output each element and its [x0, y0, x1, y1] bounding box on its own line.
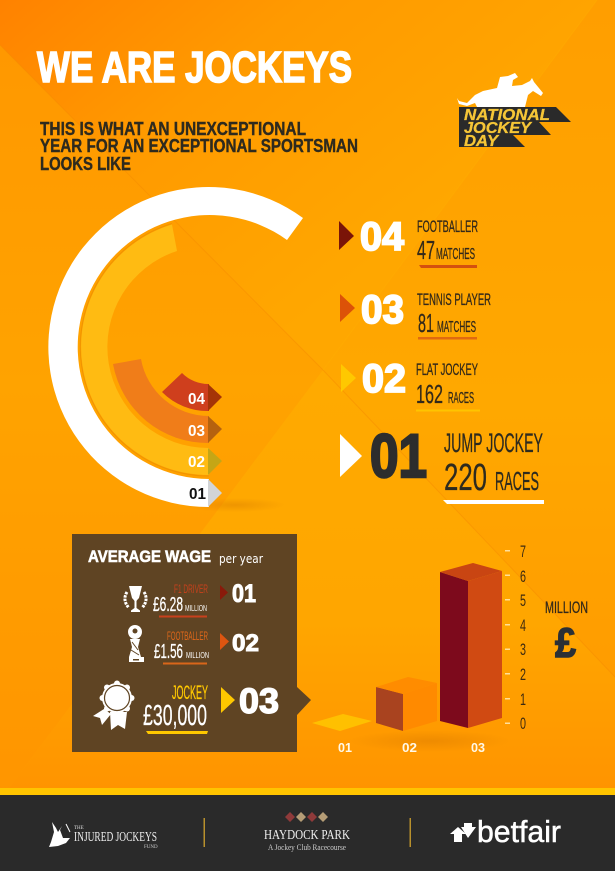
ranking: tennis player: 81: [418, 308, 434, 338]
ring 02 flat jockey: 02: [188, 454, 205, 471]
ranking: footballer: FOOTBALLER: [417, 217, 478, 236]
wage row: F1 driver: [153, 580, 256, 618]
panel: average wage: [72, 534, 311, 752]
axis scale: 4: [520, 616, 526, 635]
wage row: jockey: 03: [239, 682, 279, 721]
logo: Haydock Park: HAYDOCK PARK: [264, 828, 350, 843]
logo: Injured Jockeys Fund: FUND: [144, 845, 158, 850]
wage row: jockey: JOCKEY: [172, 683, 208, 704]
icon: F1 trophy with laurels: [125, 586, 146, 612]
ranking: jump jockey: [340, 422, 544, 504]
wage row: jockey: [143, 682, 279, 734]
ranking: jump jockey: 220: [444, 457, 487, 499]
unit label: million pounds: £: [555, 619, 576, 666]
logo: National Jockey Day: NATIONAL: [464, 107, 550, 124]
heading: average wage per year: per year: [219, 551, 264, 566]
axis scale: 5: [520, 591, 526, 610]
wage row: F1 driver: 01: [232, 580, 256, 608]
ranking: footballer: 04: [360, 215, 405, 259]
ranking: flat jockey: FLAT JOCKEY: [416, 360, 478, 379]
axis scale: 3: [520, 640, 526, 659]
unit label: million pounds: MILLION: [545, 598, 588, 617]
wage row: footballer: [154, 629, 259, 664]
ranking: jump jockey: 01: [370, 422, 427, 490]
ranking: footballer: MATCHES: [436, 246, 475, 263]
icon: rosette: [93, 680, 134, 730]
logo: Haydock Park: [264, 812, 350, 852]
axis labels: 02: [402, 740, 417, 755]
footer: [0, 788, 615, 871]
axis labels: [338, 740, 485, 755]
icon: football cup: [128, 625, 144, 662]
subtitle: YEAR FOR AN EXCEPTIONAL SPORTSMAN: [40, 136, 358, 156]
logo: National Jockey Day: [457, 73, 571, 150]
axis labels: 03: [471, 740, 485, 755]
ranking: footballer: 47: [417, 235, 435, 265]
logo: National Jockey Day: DAY: [464, 133, 499, 150]
wage row: footballer: £1.56: [154, 641, 183, 663]
axis scale: 0: [520, 714, 526, 733]
subtitle: [40, 119, 358, 174]
axis labels: 01: [338, 740, 352, 755]
wage row: F1 driver: MILLION: [185, 603, 207, 613]
wage row: footballer: 02: [232, 630, 259, 657]
logo: National Jockey Day: JOCKEY: [464, 120, 532, 137]
wage row: footballer: FOOTBALLER: [167, 629, 208, 643]
subtitle: THIS IS WHAT AN UNEXCEPTIONAL: [40, 119, 306, 139]
ring 01 jump jockey: [48, 187, 303, 507]
ring 01 jump jockey: 01: [189, 486, 206, 503]
ring 02 flat jockey: [80, 224, 222, 476]
bar 02 footballer: [376, 677, 437, 731]
ring 03 tennis player: 03: [188, 423, 205, 440]
heading: average wage per year: AVERAGE WAGE: [88, 548, 211, 566]
logo: Haydock Park: A Jockey Club Racecourse: [268, 843, 346, 852]
ring 03 tennis player: [113, 359, 222, 443]
ranking: flat jockey: 162: [416, 379, 443, 409]
subtitle: LOOKS LIKE: [40, 154, 131, 174]
logo: Injured Jockeys Fund: THE: [74, 826, 84, 831]
ranking: flat jockey: RACES: [448, 390, 474, 407]
ranking: tennis player: [340, 288, 491, 340]
axis scale: [505, 542, 526, 733]
wage row: F1 driver: £6.28: [153, 594, 183, 616]
axis scale: 6: [520, 567, 526, 586]
ranking: flat jockey: 02: [362, 357, 406, 401]
ranking: tennis player: MATCHES: [437, 319, 476, 336]
ranking: tennis player: TENNIS PLAYER: [417, 290, 491, 309]
wage row: F1 driver: F1 DRIVER: [174, 582, 208, 596]
ring 04 footballer: [162, 373, 222, 411]
axis scale: 7: [520, 542, 526, 561]
ranking: footballer: [339, 215, 478, 268]
unit label: million pounds: [545, 598, 588, 666]
axis scale: 2: [520, 665, 526, 684]
ring 04 footballer: 04: [188, 391, 205, 408]
ranking: flat jockey: [341, 357, 480, 412]
icon: horse and jockey silhouette: [457, 73, 543, 107]
bar 01 jockey: [312, 714, 372, 731]
logo: betfair: betfair: [477, 814, 561, 849]
radial chart: [48, 187, 303, 507]
bar chart: wages in million pounds: [312, 542, 526, 755]
ranking: jump jockey: RACES: [495, 466, 539, 496]
wage row: footballer: MILLION: [186, 650, 209, 660]
logo: Injured Jockeys Fund: INJURED JOCKEYS: [74, 829, 157, 844]
logo: Injured Jockeys Fund: [49, 822, 158, 850]
axis scale: 1: [520, 690, 526, 709]
bar 03 F1 driver: [440, 563, 502, 728]
title: WE ARE JOCKEYS: [37, 43, 352, 92]
wage row: jockey: £30,000: [143, 700, 207, 732]
ranking: tennis player: 03: [361, 288, 404, 332]
